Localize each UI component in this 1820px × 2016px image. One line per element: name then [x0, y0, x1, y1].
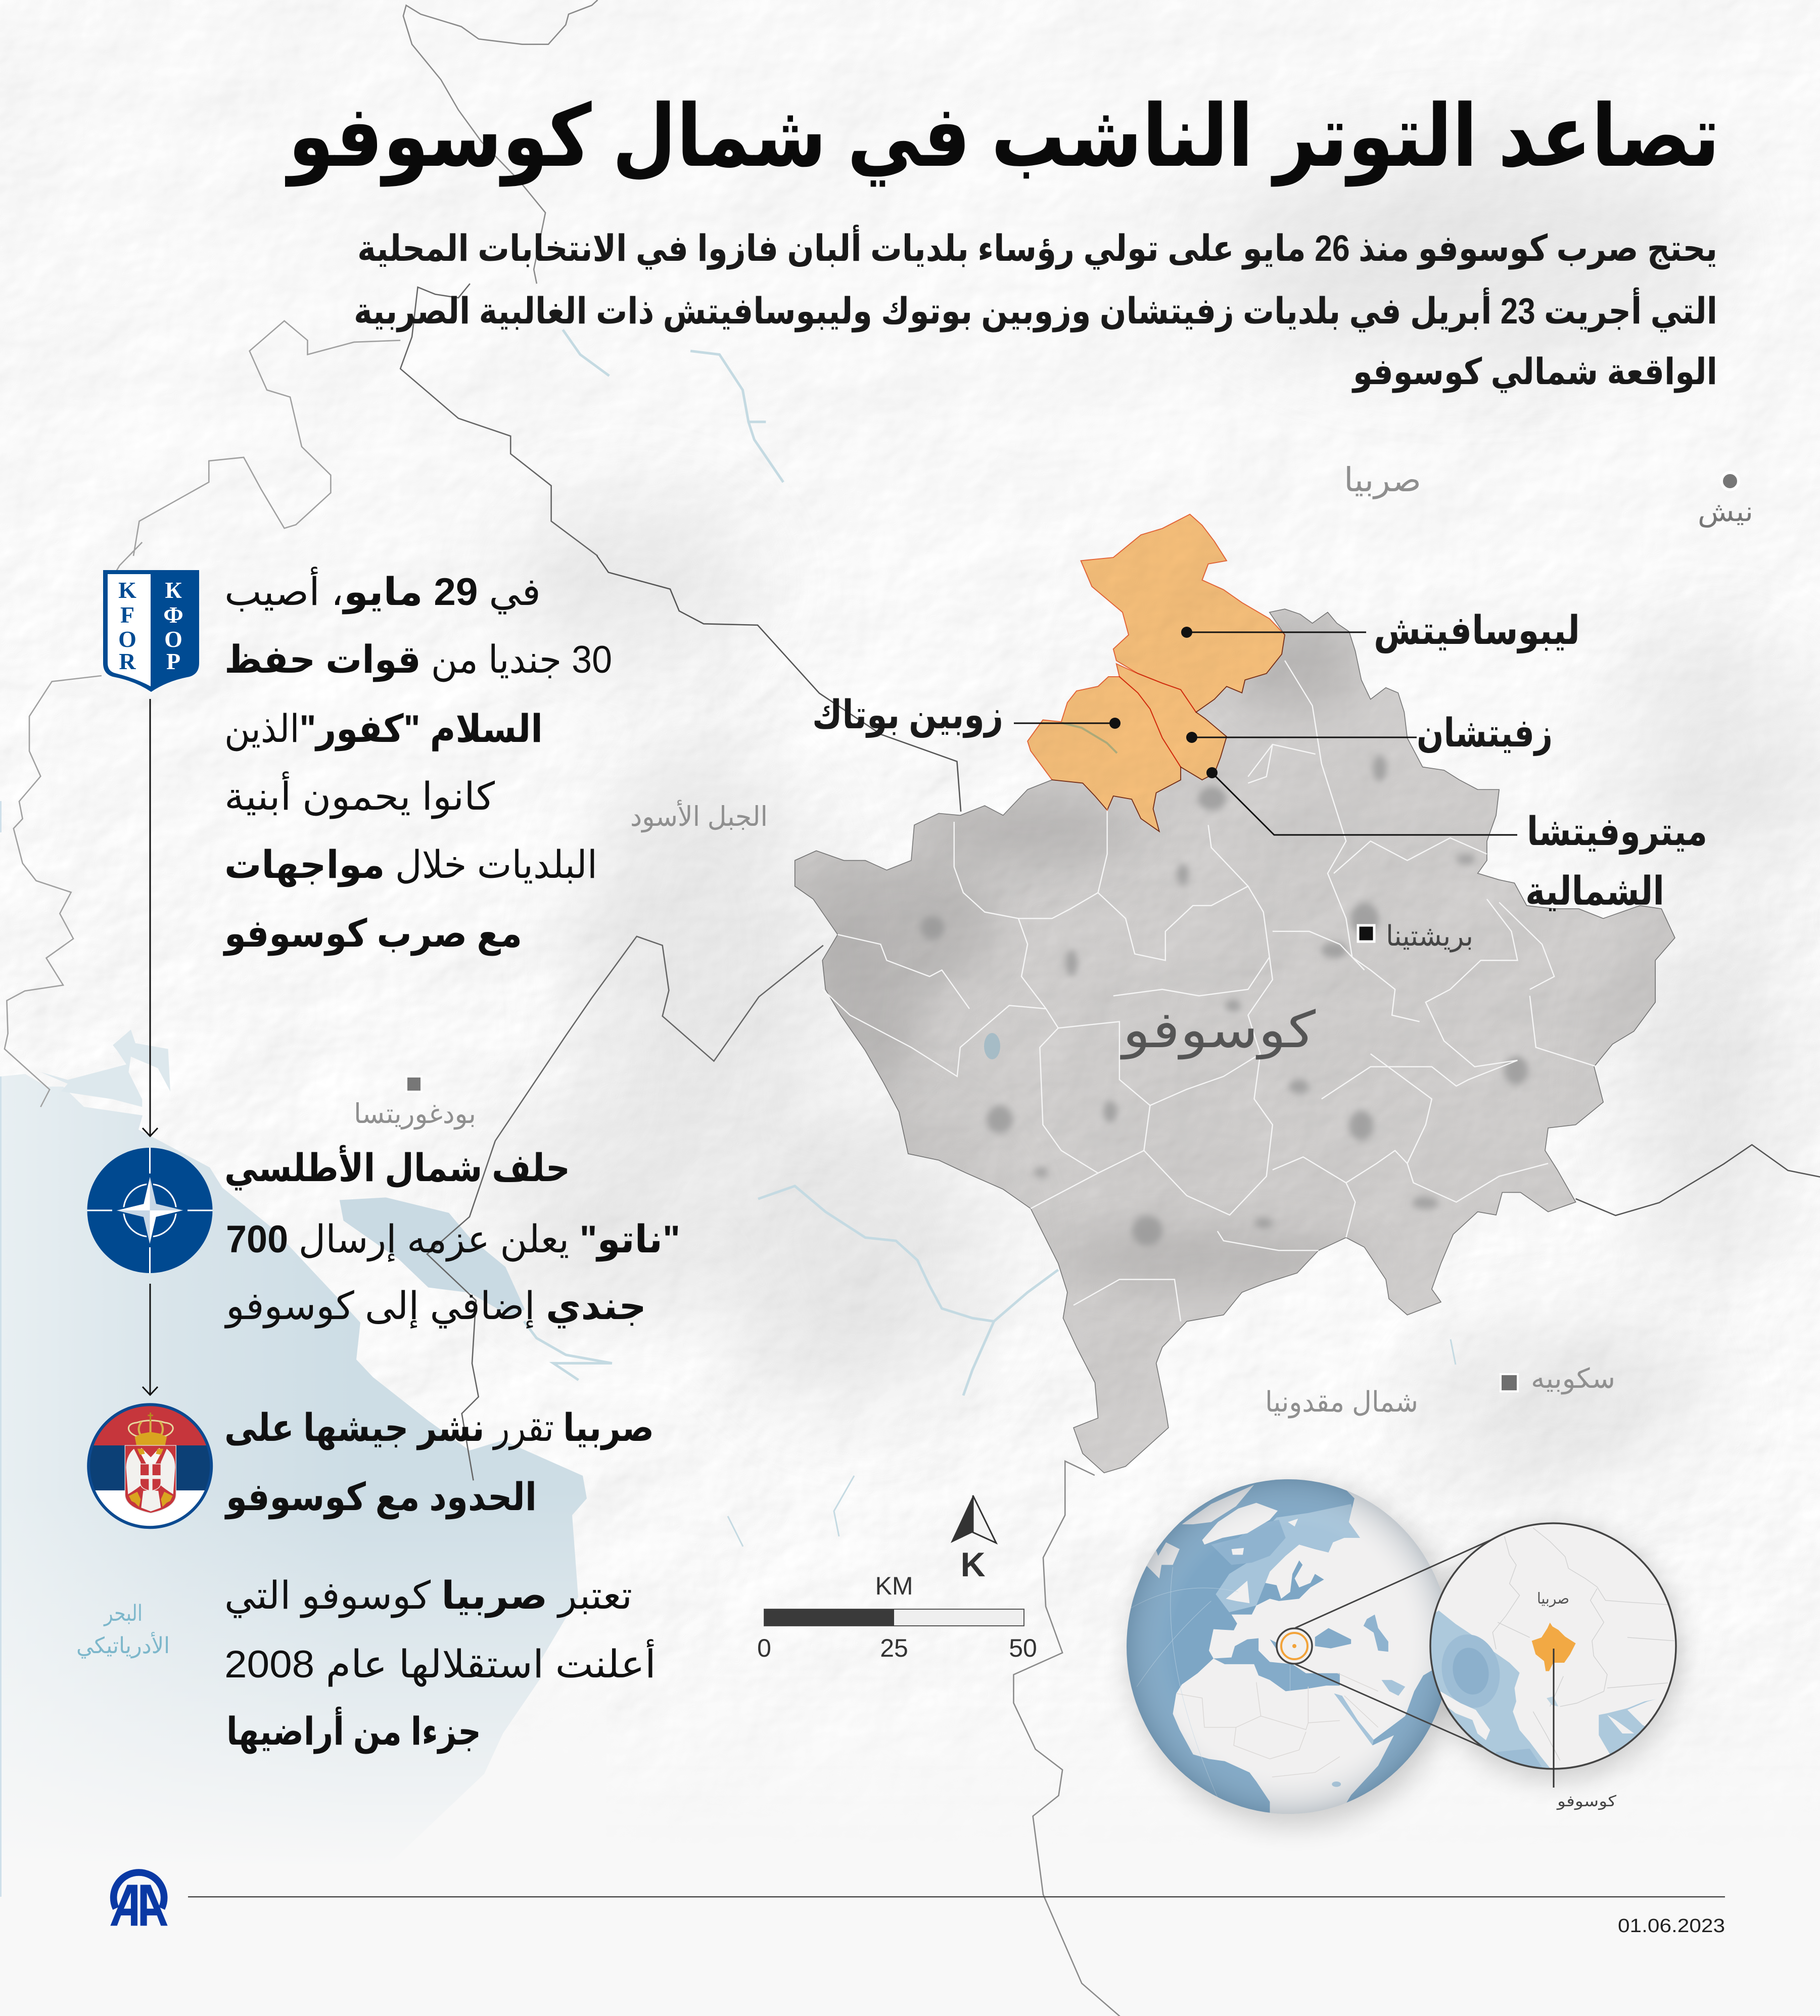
callout: Leposavic: ليبوسافيتش — [1374, 608, 1580, 653]
icon: NATO — [87, 1148, 212, 1273]
sea — [0, 801, 606, 1900]
arrow: NATO to Serbia — [143, 1284, 158, 1395]
icon: KFOR shield: Р — [166, 648, 180, 674]
icon: KFOR shield: F — [120, 602, 134, 628]
text block: NATO: حلف شمال الأطلسي — [224, 1145, 570, 1191]
municipality: Zubin Potok — [1028, 677, 1181, 831]
text block: KFOR: في 29 مايو، أصيب — [224, 567, 541, 615]
text block: Serbia: الحدود مع كوسوفو — [224, 1476, 537, 1520]
footer rule — [188, 1896, 1725, 1897]
map labels: reference places — [354, 461, 1753, 1419]
text block: KFOR: مع صرب كوسوفو — [222, 912, 522, 956]
city: Skopje: سكوبيه — [1531, 1364, 1615, 1394]
text block: Serbia — [224, 1406, 654, 1520]
scale bar: 50 — [1009, 1634, 1037, 1662]
logo: Anadolu Agency — [110, 1872, 168, 1926]
callout: Zvecan — [1186, 711, 1553, 756]
inset Kosovo — [1532, 1623, 1576, 1671]
text block: KFOR: السلام "كفور"الذين — [224, 708, 543, 752]
map labels: reference places: صربيا — [1344, 461, 1421, 499]
subtitle text: الواقعة شمالي كوسوفو — [1351, 352, 1717, 393]
map background — [34, 111, 1820, 1654]
lake: Kotor bay — [40, 1029, 170, 1107]
municipality: Leposavic — [1081, 514, 1285, 712]
subtitle text: التي أجريت 23 أبريل في بلديات زفيتشان وزوبين بوتوك وليبوسافيتش ذات الغالبية الصربية — [354, 287, 1717, 333]
text block: independence: أعلنت استقلالها عام 2008 — [224, 1639, 656, 1687]
rivers — [524, 330, 1456, 1546]
inset detail — [1429, 1523, 1678, 1810]
lake in Kosovo — [984, 1033, 1000, 1059]
territory: Kosovo — [795, 609, 1675, 1473]
callout: Zubin Potok: زوبين بوتاك — [812, 692, 1003, 738]
text block: NATO — [224, 1145, 680, 1329]
city: Podgorica: بودغوريتسا — [354, 1099, 476, 1130]
icon: KFOR shield — [103, 570, 199, 692]
icon: KFOR shield: R — [119, 648, 136, 674]
icon: KFOR shield: K — [118, 577, 136, 603]
city: Nis — [1698, 473, 1753, 528]
callout: North Mitrovica: الشمالية — [1525, 869, 1664, 913]
city: Podgorica — [354, 1076, 476, 1130]
callout: Zvecan: زفيتشان — [1417, 711, 1553, 756]
callout: North Mitrovica: ميتروفيتشا — [1527, 809, 1707, 855]
scale bar: 0 — [757, 1634, 771, 1662]
text block: KFOR: 30 جنديا من قوات حفظ — [224, 638, 612, 682]
locator globe — [1127, 1479, 1681, 1825]
map labels: reference places: الجبل الأسود — [630, 800, 768, 832]
label: Kosovo: كوسوفو — [1119, 1002, 1316, 1059]
zoom connector lines — [1295, 1538, 1496, 1753]
text block: Serbia: صربيا تقرر نشر جيشها على — [224, 1406, 654, 1450]
text block: independence: تعتبر صربيا كوسوفو التي — [224, 1574, 632, 1618]
icon: KFOR shield: Ф — [163, 602, 183, 628]
kosovo map — [795, 514, 1675, 1473]
map labels: reference places: شمال مقدونيا — [1265, 1386, 1418, 1419]
inset detail: كوسوفو — [1556, 1793, 1617, 1810]
arrow: KFOR to NATO — [143, 699, 158, 1136]
text block: independence: جزءا من أراضيها — [226, 1706, 481, 1754]
municipal boundaries — [822, 661, 1597, 1322]
text block: KFOR — [222, 567, 612, 956]
subtitle text: يحتج صرب كوسوفو منذ 26 مايو على تولي رؤساء بلديات ألبان فازوا في الانتخابات المحلية — [357, 224, 1717, 270]
icon: KFOR shield: К — [165, 577, 182, 603]
icon: Serbia flag — [86, 1402, 217, 1531]
inset detail: صربيا — [1537, 1590, 1569, 1607]
label: Adriatic Sea — [76, 1601, 170, 1659]
text block: KFOR: البلديات خلال مواجهات — [224, 843, 597, 887]
text block: KFOR: كانوا يحمون أبنية — [224, 771, 495, 819]
date: 01.06.2023 — [1618, 1915, 1725, 1937]
scale bar — [757, 1572, 1037, 1662]
callout: North Mitrovica — [1206, 767, 1707, 913]
municipality: Zvecan — [1116, 664, 1227, 780]
text block: NATO: جندي إضافي إلى كوسوفو — [224, 1285, 646, 1329]
inland and marginal seas — [1214, 1638, 1340, 1691]
subtitle text — [354, 224, 1717, 393]
lake: Shkodra — [340, 1197, 525, 1317]
city: Nis: نيش — [1698, 497, 1753, 528]
icon: KFOR shield: O — [118, 626, 136, 652]
scale bar: 25 — [880, 1634, 908, 1662]
callout: Leposavic — [1181, 608, 1580, 653]
icon: north arrow: K — [960, 1545, 986, 1584]
coat of arms — [125, 1413, 176, 1513]
label: Adriatic Sea: البحر — [103, 1601, 143, 1626]
text block: NATO: "ناتو" يعلن عزمه إرسال 700 — [226, 1218, 680, 1262]
icon: north arrow — [951, 1495, 996, 1584]
city: Pristina: بريشتينا — [1386, 920, 1473, 953]
land masses — [1173, 1481, 1473, 1817]
label: Adriatic Sea: الأدرياتيكي — [76, 1631, 170, 1659]
graticule and borders — [1176, 1673, 1378, 1777]
icon: KFOR shield: О — [164, 626, 182, 652]
text block: independence — [224, 1574, 656, 1754]
scale bar: KM — [875, 1572, 913, 1600]
shallow seas — [1216, 1504, 1360, 1612]
